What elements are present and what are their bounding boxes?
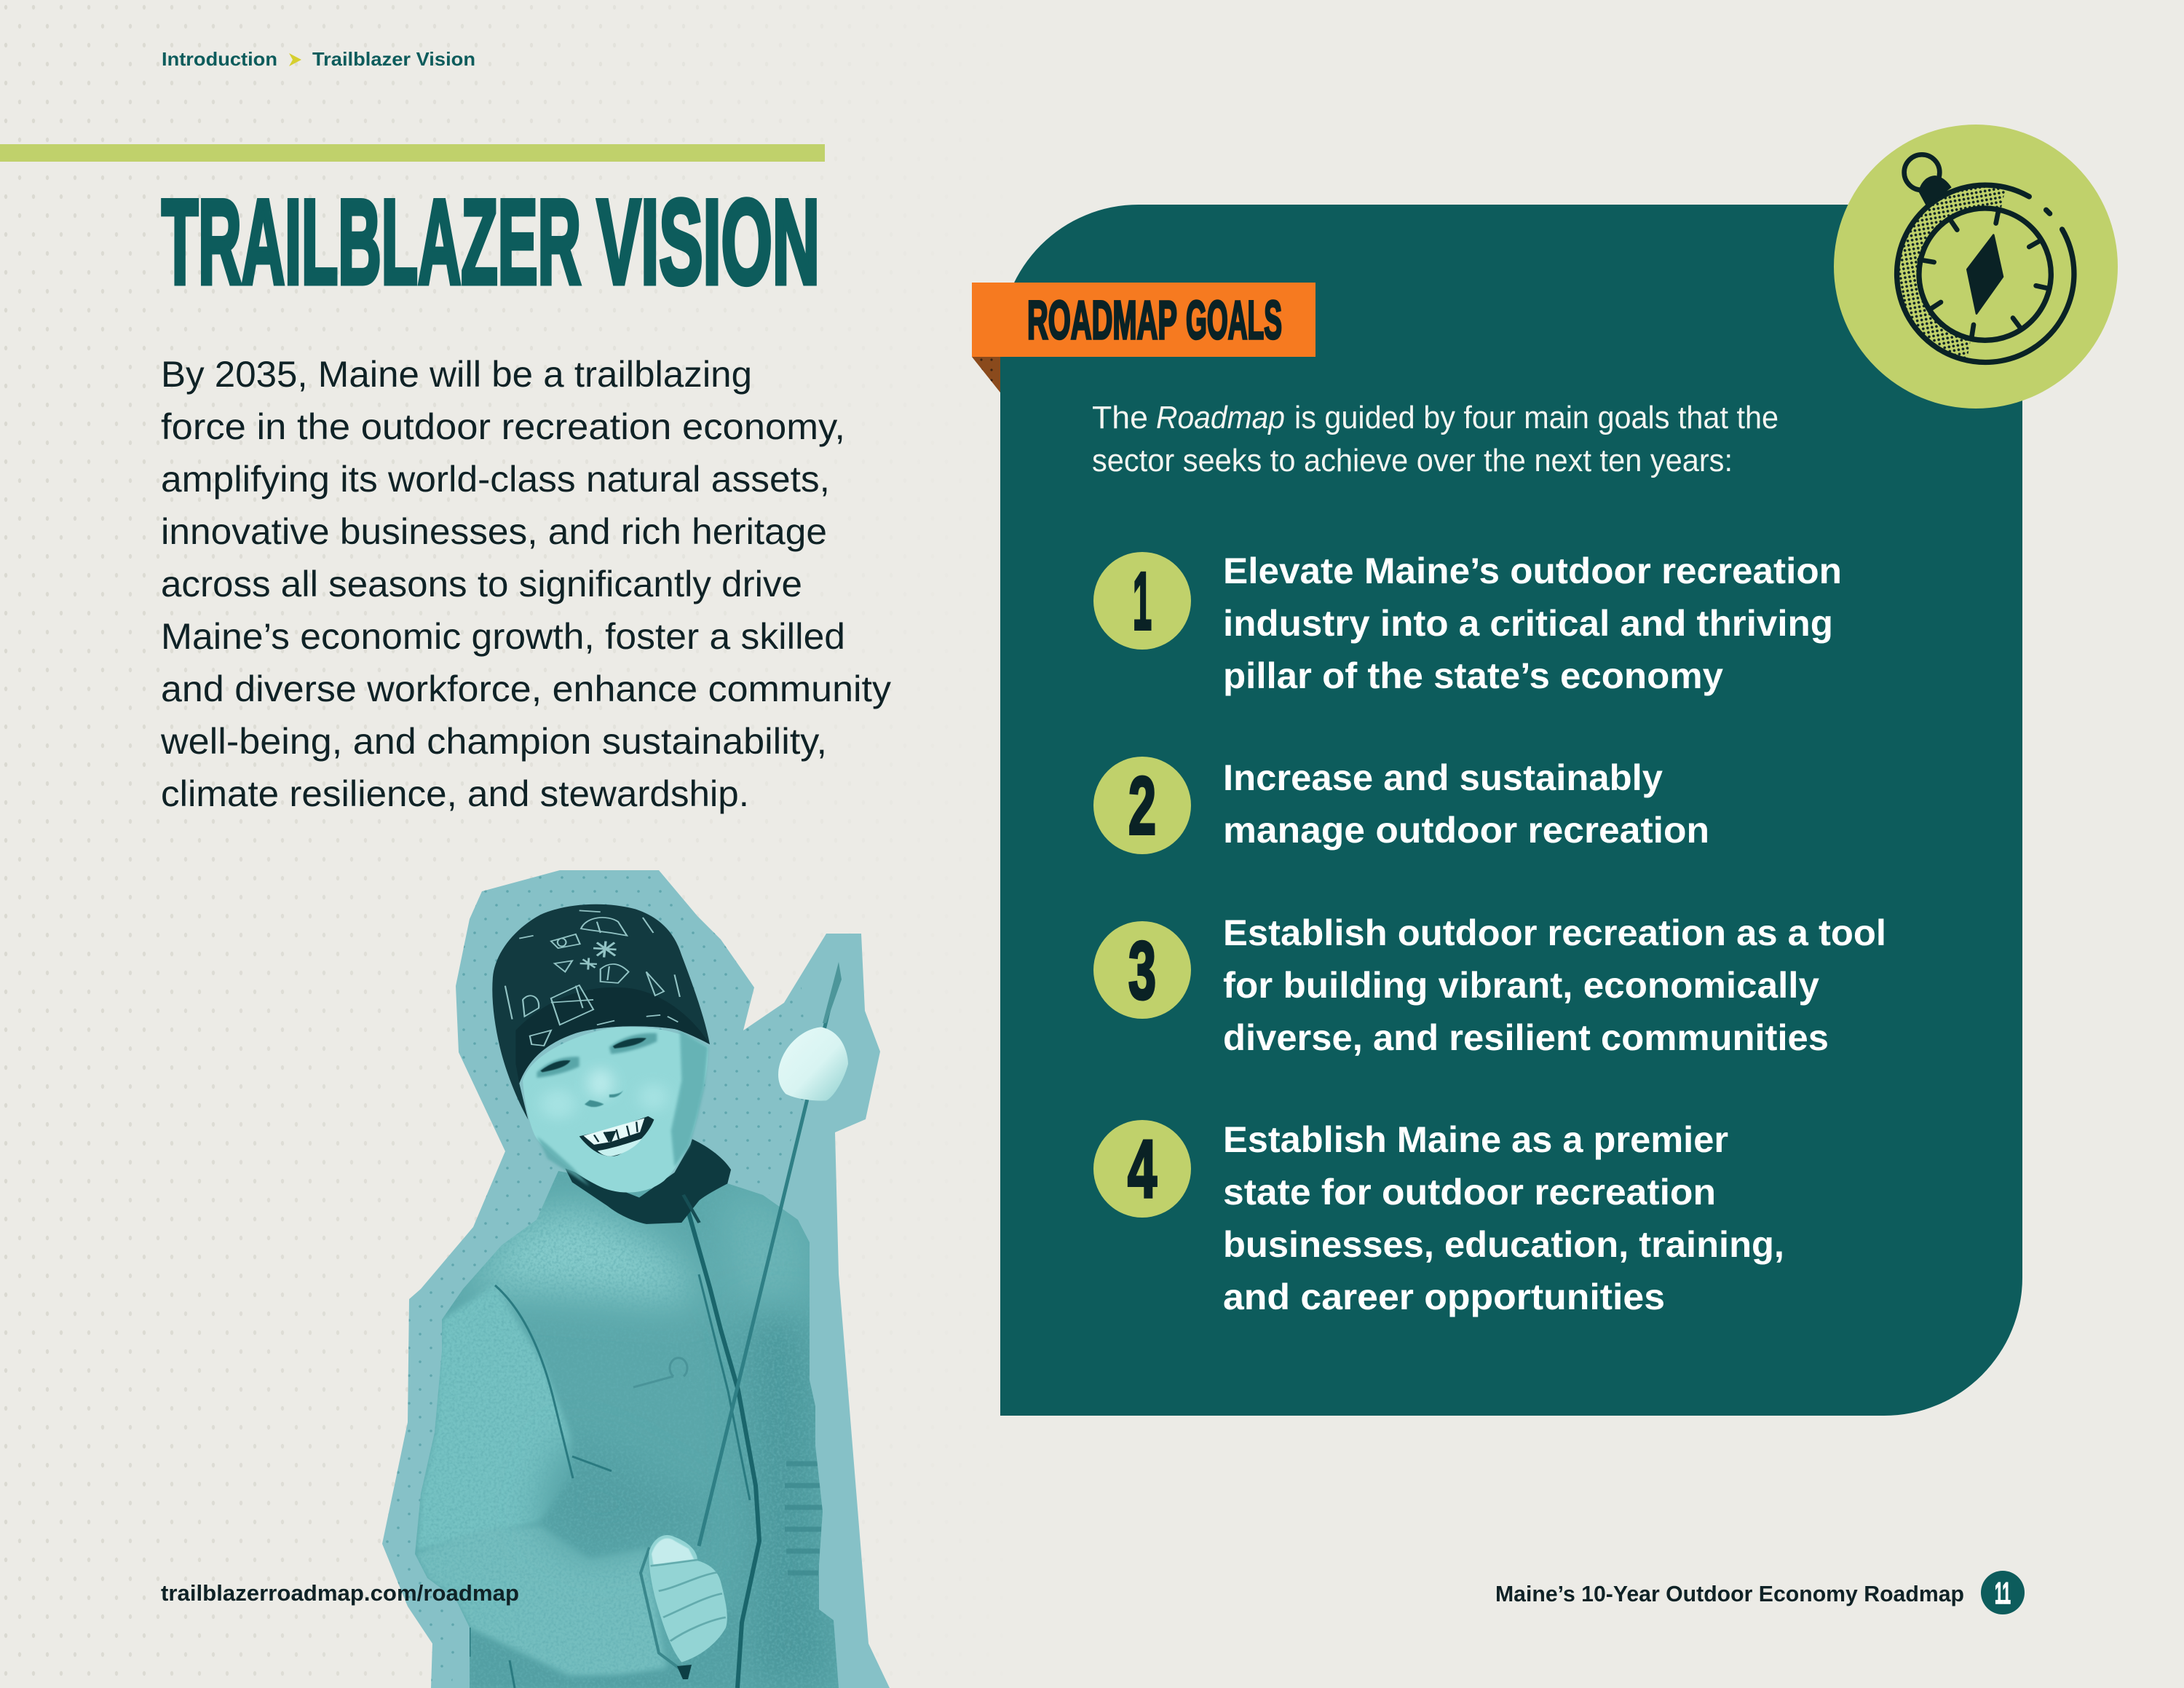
goal 2 text: Increase and sustainably	[1223, 757, 1663, 798]
goal 3 text: Establish outdoor recreation as a tool	[1223, 912, 1886, 953]
goal 2 text: manage outdoor recreation	[1223, 810, 1709, 851]
goal 1 text	[1223, 551, 1842, 696]
goal 3	[1093, 912, 1886, 1058]
eyes	[537, 1033, 657, 1078]
head	[492, 904, 848, 1224]
vision paragraph: Maine’s economic growth, foster a skilled	[161, 616, 845, 657]
page number	[1981, 1571, 2025, 1614]
number badge 4: 4	[1128, 1124, 1157, 1215]
hat	[492, 904, 710, 1119]
marshmallow	[778, 1027, 848, 1101]
intro text: Roadmap	[1156, 401, 1285, 435]
panel background	[1000, 205, 2022, 1416]
number badge 1	[1093, 552, 1191, 650]
number badge 2	[1093, 757, 1191, 854]
goal 1 text: pillar of the state’s economy	[1223, 655, 1723, 696]
goal 1 text: industry into a critical and thriving	[1223, 603, 1833, 644]
hand	[649, 1535, 727, 1663]
jacket seams and zip	[470, 1195, 823, 1688]
teal cutout shape	[382, 870, 890, 1688]
goal 4 text	[1223, 1119, 1784, 1317]
goal 1 text: Elevate Maine’s outdoor recreation	[1223, 551, 1842, 591]
footer title: Maine’s 10-Year Outdoor Economy Roadmap	[1495, 1581, 1964, 1606]
vision paragraph: By 2035, Maine will be a trailblazing	[161, 354, 752, 395]
goal 4 text: and career opportunities	[1223, 1277, 1665, 1317]
intro text: sector seeks to achieve over the next ten years:	[1092, 443, 1733, 478]
footer url: trailblazerroadmap.com/roadmap	[161, 1580, 519, 1606]
vision paragraph: climate resilience, and stewardship.	[161, 773, 749, 814]
goal 4 text: Establish Maine as a premier	[1223, 1119, 1728, 1160]
intro text: The	[1092, 401, 1148, 435]
vision paragraph: amplifying its world-class natural assets,	[161, 459, 830, 500]
breadcrumb: Trailblazer Vision	[312, 48, 475, 70]
page number: 11	[1995, 1576, 2011, 1610]
number badge 1: 1	[1133, 556, 1152, 647]
nose	[585, 1090, 623, 1107]
vision paragraph: force in the outdoor recreation economy,	[161, 406, 845, 447]
goal 3 text: diverse, and resilient communities	[1223, 1017, 1829, 1058]
banner: roadmap goals: GOALS	[1186, 290, 1282, 350]
breadcrumb: Introduction	[162, 48, 277, 70]
vision paragraph	[160, 354, 891, 814]
goal 1	[1093, 551, 1842, 696]
number badge 3	[1093, 921, 1191, 1019]
number badge 4	[1093, 1120, 1191, 1218]
vision paragraph: innovative businesses, and rich heritage	[161, 511, 827, 552]
title: VISION	[597, 175, 820, 309]
intro text: is guided by four main goals that the	[1294, 401, 1779, 435]
number badge 2: 2	[1128, 760, 1156, 851]
photo: child holding marshmallow on teal cutout	[382, 870, 890, 1688]
banner: roadmap goals	[972, 283, 1315, 357]
goal 4 text: state for outdoor recreation	[1223, 1172, 1716, 1212]
mouth	[579, 1116, 654, 1156]
skewer	[699, 962, 842, 1546]
collar	[565, 1139, 731, 1224]
banner: roadmap goals: ROADMAP	[1027, 290, 1177, 350]
goal 3 text: for building vibrant, economically	[1223, 965, 1819, 1006]
number badge 3: 3	[1128, 925, 1156, 1016]
intro text	[1092, 401, 1779, 478]
background dot texture	[4, 5, 697, 1676]
accent bar	[0, 144, 825, 162]
goal 2	[1093, 757, 1709, 854]
goal 3 text	[1223, 912, 1886, 1058]
goal 4	[1093, 1119, 1784, 1317]
vision paragraph: and diverse workforce, enhance community	[161, 669, 891, 709]
face	[523, 1027, 708, 1193]
title: TRAILBLAZER	[162, 175, 581, 309]
vision paragraph: well-being, and champion sustainability,	[160, 721, 827, 762]
icon: compass badge	[1834, 125, 2118, 409]
goal 4 text: businesses, education, training,	[1223, 1224, 1784, 1265]
breadcrumb	[162, 48, 475, 70]
panel: roadmap goals	[972, 205, 2022, 1416]
goal 2 text	[1223, 757, 1709, 851]
banner fold	[972, 357, 1000, 393]
jacket	[408, 1165, 844, 1688]
vision paragraph: across all seasons to significantly drive	[161, 564, 802, 604]
